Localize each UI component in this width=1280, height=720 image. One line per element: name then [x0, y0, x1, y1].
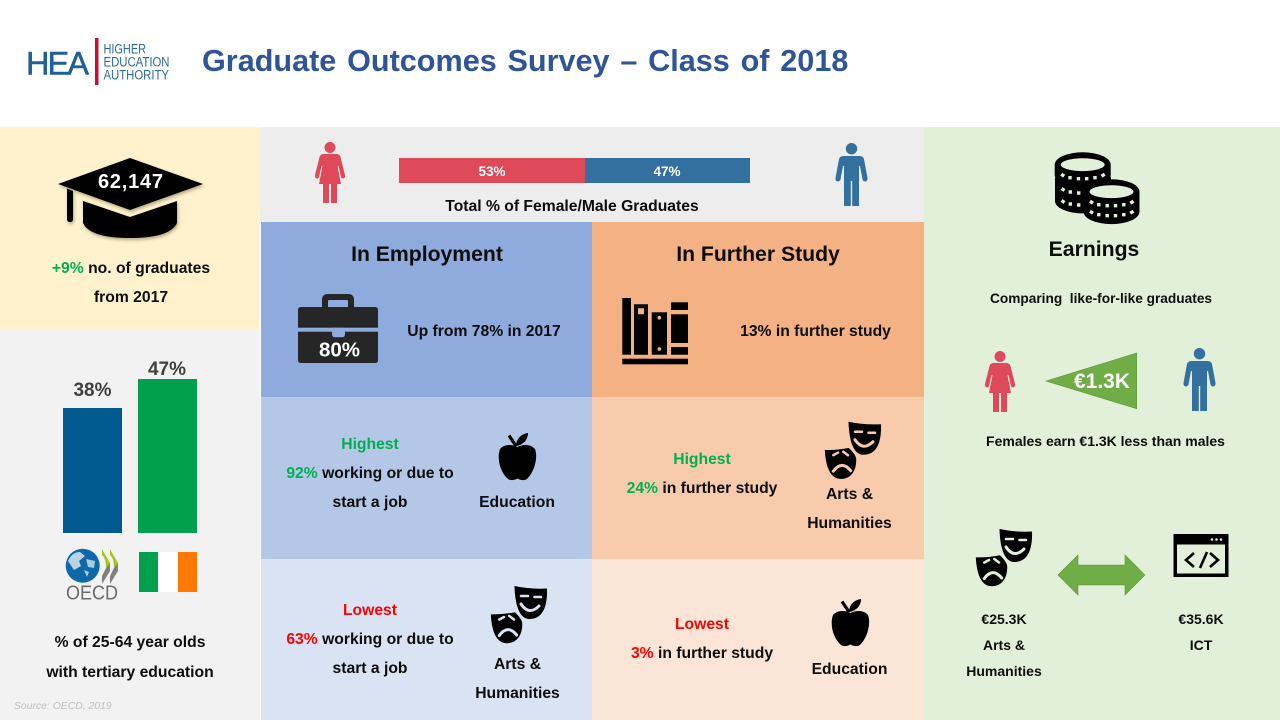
icon: briefcase 80%: [298, 294, 378, 363]
text: lowest employment: 63% working or due to: [286, 631, 454, 648]
callout: €1.3K gap arrow: [1046, 353, 1137, 409]
icon: Irish flag: [139, 552, 197, 592]
bar chart: OECD vs Ireland: [63, 359, 197, 533]
text: highest employment: [286, 436, 454, 511]
icon: female: [315, 142, 345, 203]
label: arts and humanities: Humanities: [807, 515, 892, 532]
text: graduates growth: from 2017: [94, 289, 168, 306]
icon: male: [835, 143, 868, 206]
icon: apple: [832, 599, 869, 646]
arrow: double-headed: [1058, 555, 1145, 595]
text: arts and humanities salary: €25.3K: [981, 611, 1027, 627]
stacked bar: 53% female 47% male: 53%: [478, 164, 506, 179]
stacked bar: 53% female 47% male: [399, 158, 750, 183]
panel: study lowest: [592, 559, 924, 720]
label: arts and humanities: Arts &: [494, 656, 541, 673]
text: graduates growth: [52, 260, 210, 306]
icon: code window: [1174, 534, 1228, 577]
text: highest further study: [627, 451, 778, 497]
text: highest employment: 92% working or due to: [286, 465, 454, 482]
text: arts and humanities salary: Humanities: [966, 663, 1042, 679]
logo: HEA Higher Education Authority: HEA: [26, 45, 89, 81]
text: highest employment: start a job: [333, 494, 407, 511]
text: lowest further study: [631, 616, 773, 662]
text: arts and humanities salary: Arts &: [983, 637, 1025, 653]
text: lowest employment: [286, 602, 454, 677]
text: ICT salary: ICT: [1190, 637, 1213, 653]
panel: gender split: [260, 127, 924, 222]
logo: HEA Higher Education Authority: [26, 38, 170, 85]
text: ICT salary: €35.6K: [1178, 611, 1224, 627]
header: [0, 0, 1280, 127]
label: arts and humanities: Humanities: [475, 685, 560, 702]
panel: employment highest: [261, 397, 592, 559]
text: females earn less: Females earn €1.3K less than males: [986, 433, 1225, 449]
icon: theatre masks: [490, 586, 547, 644]
icon: female: [985, 351, 1015, 412]
icon: briefcase 80%: 80%: [319, 339, 360, 362]
stacked bar: 53% female 47% male: 47%: [653, 164, 681, 179]
text: highest further study: 24% in further study: [627, 480, 778, 497]
text: ICT salary: [1178, 611, 1224, 653]
text: 13% in further study: 13% in further study: [740, 323, 891, 340]
panel: study highest: [592, 397, 924, 559]
text: highest employment: Highest: [341, 436, 400, 453]
text: arts and humanities salary: [966, 611, 1042, 679]
text: tertiary education caption: [45, 634, 214, 681]
text: up from 78%: Up from 78% in 2017: [407, 323, 561, 340]
bar chart: OECD vs Ireland: 47%: [148, 359, 186, 380]
text: graduates growth: +9% no. of graduates: [52, 260, 210, 277]
label: education: Education: [479, 494, 555, 511]
text: lowest further study: Lowest: [675, 616, 730, 633]
icon: graduation cap with 62,147: [58, 158, 203, 238]
panel: employment lowest: [261, 559, 592, 720]
icon: theatre masks: [975, 529, 1032, 587]
label: arts and humanities: Arts &: [826, 486, 873, 503]
icon: apple: [499, 433, 536, 480]
panel: earnings: [924, 127, 1280, 720]
label: education: Education: [812, 661, 887, 678]
icon: books: [622, 298, 688, 364]
text: lowest further study: 3% in further study: [631, 645, 773, 662]
icon: male: [1183, 348, 1216, 411]
panel: graduates total: [0, 127, 260, 330]
logo: HEA Higher Education Authority: AUTHORITY: [104, 67, 169, 82]
caption: total female/male: Total % of Female/Male Graduates: [445, 198, 699, 215]
logo: HEA Higher Education Authority: EDUCATION: [104, 55, 170, 70]
panel: in further study: [592, 222, 924, 397]
label: arts and humanities: [807, 486, 892, 532]
bar chart: OECD vs Ireland: 38%: [73, 380, 112, 401]
icon: OECD logo: [66, 549, 118, 604]
text: tertiary education caption: with tertiary education: [45, 664, 214, 681]
heading: In Further Study: [676, 243, 840, 266]
text: highest further study: Highest: [673, 451, 732, 468]
callout: €1.3K gap arrow: €1.3K: [1074, 370, 1130, 393]
logo: HEA Higher Education Authority: HIGHER: [104, 42, 146, 57]
text: tertiary education caption: % of 25-64 year olds: [55, 634, 206, 651]
icon: OECD logo: OECD: [66, 582, 118, 604]
icon: theatre masks: [824, 422, 881, 480]
icon: graduation cap with 62,147: 62,147: [98, 171, 163, 193]
icon: coins: [1055, 152, 1140, 224]
text: lowest employment: start a job: [333, 660, 407, 677]
label: arts and humanities: [475, 656, 560, 702]
heading: In Employment: [351, 243, 503, 266]
text: comparing: Comparing like-for-like graduates: [990, 291, 1212, 306]
source: Source: OECD, 2019: [14, 701, 112, 712]
text: lowest employment: Lowest: [343, 602, 398, 619]
heading: earnings: Earnings: [1049, 238, 1139, 261]
panel: tertiary education comparison: [0, 330, 260, 720]
panel: in employment: [261, 222, 592, 397]
title: Graduate Outcomes Survey – Class of 2018: [202, 44, 848, 78]
